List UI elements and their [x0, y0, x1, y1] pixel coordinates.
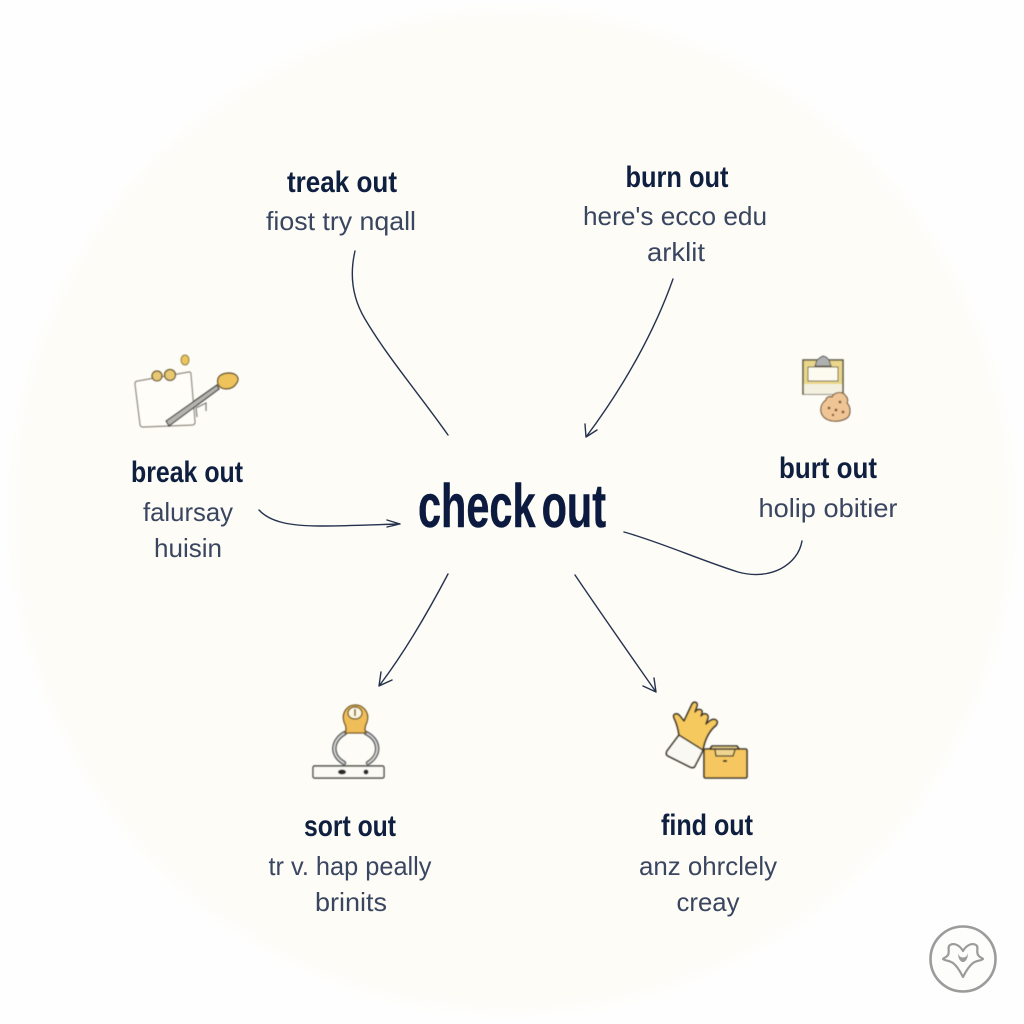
heading: burt out	[779, 452, 877, 485]
knob top	[343, 705, 368, 733]
node: burt out	[758, 452, 898, 523]
cookie	[821, 393, 850, 421]
clip	[815, 356, 831, 366]
icon: notepad and brush	[135, 355, 238, 427]
description line 2: arklit	[647, 237, 706, 267]
heading: treak out	[287, 166, 397, 199]
base plate	[313, 766, 384, 778]
description line 1: tr v. hap peally	[268, 851, 432, 881]
lower panel	[804, 384, 842, 394]
box body	[704, 749, 747, 778]
central title: check out	[418, 472, 606, 540]
arrow: centre to sort out	[379, 574, 448, 686]
node: sort out	[268, 810, 432, 917]
heading: break out	[131, 456, 243, 489]
description line 2: huisin	[154, 533, 222, 563]
box lid	[710, 746, 739, 749]
knob pupil	[354, 709, 356, 716]
inner mark	[958, 953, 968, 962]
description line 2: brinits	[315, 887, 387, 917]
ring inner	[334, 733, 377, 763]
clip	[196, 403, 206, 417]
heading: burn out	[626, 161, 728, 194]
small bee mark	[181, 355, 189, 365]
paper	[808, 367, 838, 381]
cookie crumbs	[828, 401, 844, 416]
note paper	[135, 372, 195, 427]
box latch	[723, 760, 727, 762]
cuff	[666, 735, 703, 768]
arrow: treak out to centre	[352, 251, 448, 435]
node: treak out	[266, 166, 416, 236]
knob eye	[348, 707, 362, 719]
arrow: centre to find out	[575, 575, 656, 692]
board	[803, 360, 843, 394]
brush head	[218, 373, 238, 389]
heading: find out	[661, 809, 753, 842]
description: holip obitier	[758, 493, 898, 523]
description line 1: anz ohrclely	[639, 851, 777, 881]
arrow: burn out to centre	[585, 279, 673, 437]
glove hand	[674, 702, 717, 750]
description line 1: falursay	[143, 497, 233, 527]
logo badge	[930, 926, 996, 992]
node: burn out	[583, 161, 767, 267]
arrow: break out to centre	[259, 510, 400, 527]
icon: clamp	[313, 705, 384, 778]
icon: glove and box	[666, 702, 747, 778]
base hole right	[364, 770, 368, 774]
node: find out	[639, 809, 777, 917]
node: break out	[131, 456, 243, 563]
brush handle	[166, 385, 219, 426]
description line 1: here's ecco edu	[583, 201, 767, 231]
pins	[152, 371, 162, 381]
heading: sort out	[304, 810, 396, 843]
heart mark	[943, 944, 983, 977]
arrow: burt out to centre	[624, 532, 802, 575]
description line 2: creay	[676, 887, 740, 917]
clamp ring	[334, 733, 377, 763]
ring	[930, 926, 996, 992]
description: fiost try nqall	[266, 206, 416, 236]
icon: clipboard and cookie	[803, 356, 850, 421]
box handle	[715, 750, 735, 756]
base holes	[338, 770, 346, 774]
